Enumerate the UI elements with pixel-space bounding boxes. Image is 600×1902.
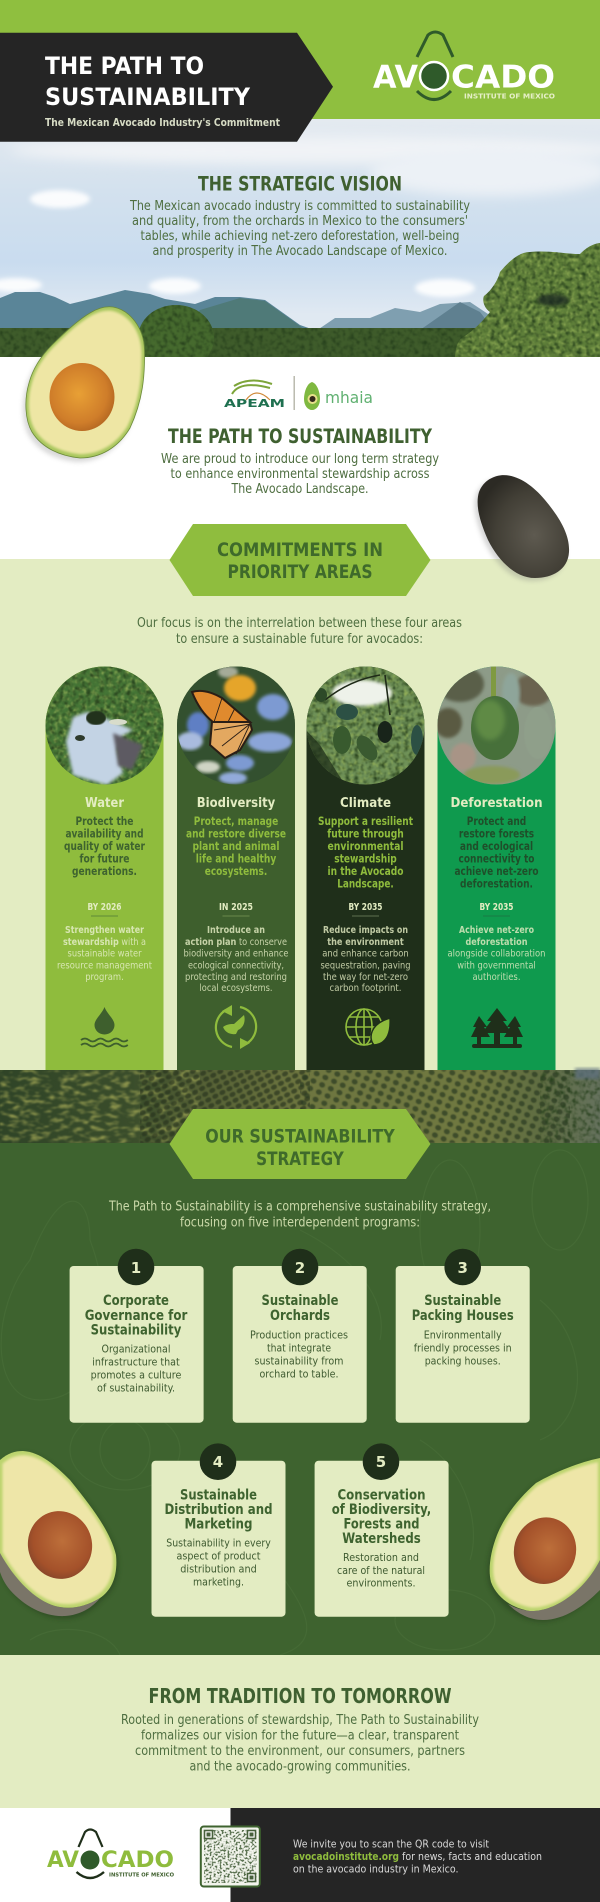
target year: BY 2035: [348, 902, 382, 913]
strategy intro text: focusing on five interdependent programs:: [180, 1216, 420, 1231]
logo: Avocado Institute of Mexico: INSTITUTE OF MEXICO: [464, 93, 555, 101]
action: and enhance carbon: [322, 949, 409, 960]
action: Reduce impacts on: [323, 925, 408, 936]
footer logo: CADO: [101, 1848, 174, 1873]
heading badge: our sustainability strategy: [170, 1109, 430, 1179]
commitment: environmental: [328, 839, 404, 853]
program card 3: [396, 1249, 530, 1423]
footer logo: AV: [47, 1848, 79, 1873]
commitment: Protect and: [467, 814, 526, 828]
header banner: black arrow: [0, 33, 333, 142]
panel: biodiversity: [176, 666, 296, 1070]
icon: globe and leaf: [346, 1009, 390, 1045]
strategic vision text: THE STRATEGIC VISION: [198, 173, 402, 196]
action: authorities.: [472, 972, 520, 983]
program card 2: Production practices: [250, 1329, 348, 1341]
action: stewardship with a: [63, 937, 146, 948]
action: alongside collaboration: [448, 949, 546, 960]
action: resource management: [57, 960, 152, 971]
strategic vision text: The Mexican avocado industry is committed to sustainability: [129, 199, 470, 214]
logo: Avocado Institute of Mexico: AV: [373, 59, 418, 95]
program card 5: 5: [376, 1453, 386, 1471]
commitment: Protect, manage: [194, 814, 278, 828]
heading badge: commitments in priority areas: COMMITMENTS IN: [217, 540, 383, 561]
commitment: deforestation.: [460, 876, 533, 890]
commitment: and restore diverse: [186, 826, 286, 840]
panel: deforestation: Deforestation: [450, 795, 542, 811]
strategic vision text: and prosperity in The Avocado Landscape of Mexico.: [152, 244, 448, 259]
commitment: connectivity to: [458, 852, 535, 866]
photo: halved avocado right: [488, 1458, 600, 1622]
program card 3: Packing Houses: [412, 1308, 514, 1324]
program card 4: distribution and: [180, 1564, 257, 1576]
panel: sustainability strategy: [0, 1109, 600, 1655]
program card 4: 4: [213, 1453, 223, 1471]
action: the way for net-zero: [323, 972, 408, 983]
panel: water: Water: [85, 795, 124, 811]
program card 2: Orchards: [270, 1308, 330, 1324]
subtitle: The Mexican Avocado Industry's Commitment: [45, 117, 280, 129]
heading badge: our sustainability strategy: OUR SUSTAINABILITY: [205, 1127, 395, 1148]
program card 5: Restoration and: [343, 1552, 419, 1564]
panel: climate: Climate: [340, 795, 391, 811]
panel: from tradition to tomorrow: [0, 1655, 600, 1808]
hero photo: sky, mountains and forest: [0, 119, 600, 371]
strategy intro text: The Path to Sustainability is a comprehensive sustainability strategy,: [108, 1200, 491, 1215]
program card 1: 1: [131, 1259, 141, 1277]
action: sequestration, paving: [320, 960, 410, 971]
commitment: availability and: [66, 826, 144, 840]
strategy intro text: [108, 1200, 491, 1231]
focus text: to ensure a sustainable future for avocados:: [176, 632, 423, 647]
panel: water: [45, 666, 165, 1070]
partner logos: APEAM and mhaia: [224, 376, 373, 410]
title: [45, 52, 251, 111]
strategic vision text: [129, 173, 470, 259]
program card 3: packing houses.: [425, 1355, 501, 1367]
action: Introduce an: [207, 925, 265, 936]
panel: from tradition to tomorrow: FROM TRADITION TO TOMORROW: [148, 1684, 452, 1708]
photo: halved avocado left: [0, 1451, 118, 1619]
program card 5: Forests and: [344, 1516, 420, 1532]
program card 4: Sustainability in every: [166, 1538, 271, 1550]
program card 2: sustainability from: [254, 1355, 344, 1367]
action: sustainable water: [68, 949, 142, 960]
program card 5: Conservation: [338, 1487, 426, 1503]
action: ecological connectivity,: [188, 960, 284, 971]
commitment: restore forests: [459, 826, 534, 840]
photo: whole dark avocado: [475, 475, 569, 581]
program card 1: infrastructure that: [92, 1356, 180, 1368]
program card 2: [233, 1249, 367, 1423]
panel: from tradition to tomorrow: Rooted in generations of stewardship, The Path to Sustainability: [121, 1713, 479, 1728]
commitment: [64, 814, 145, 878]
strategic vision text: tables, while achieving net-zero deforestation, well-being: [140, 229, 460, 244]
panel: from tradition to tomorrow: and the avocado-growing communities.: [190, 1760, 410, 1775]
commitment: life and healthy: [196, 852, 277, 866]
program card 3: friendly processes in: [414, 1342, 512, 1354]
photo: stream: [45, 666, 165, 786]
header band: [0, 0, 600, 119]
program card 1: Sustainability: [91, 1322, 181, 1338]
commitment: achieve net-zero: [454, 864, 539, 878]
title: THE PATH TO: [45, 52, 204, 80]
commitment: plant and animal: [192, 839, 280, 853]
action: [448, 925, 546, 983]
icon: trees: [471, 1008, 523, 1048]
program card 4: Marketing: [184, 1516, 252, 1532]
partner logos: APEAM and mhaia: APEAM: [224, 397, 285, 410]
footer: [0, 1808, 600, 1902]
program card 4: marketing.: [193, 1577, 244, 1589]
commitment: [454, 814, 539, 890]
commitment: and ecological: [460, 839, 533, 853]
footer logo: INSTITUTE OF MEXICO: [109, 1873, 175, 1879]
title: SUSTAINABILITY: [45, 83, 251, 111]
program card 1: promotes a culture: [91, 1370, 181, 1382]
panel: from tradition to tomorrow: commitment to the environment, our consumers, partners: [135, 1744, 465, 1759]
action: Achieve net-zero: [459, 925, 534, 936]
commitment: generations.: [72, 864, 137, 878]
action: the environment: [327, 937, 404, 948]
program card 2: orchard to table.: [260, 1368, 338, 1380]
program card 5: of Biodiversity,: [332, 1502, 431, 1518]
logo: Avocado Institute of Mexico: CADO: [451, 59, 555, 95]
commitment: quality of water: [64, 839, 145, 853]
action: Strengthen water: [65, 925, 144, 936]
call to action text: avocadoinstitute.org: [293, 1851, 399, 1863]
program card 3: Environmentally: [424, 1329, 502, 1341]
photo: avocado on branch: [434, 666, 557, 786]
program card 5: Watersheds: [342, 1531, 421, 1547]
strategic vision text: and quality, from the orchards in Mexico to the consumers': [132, 214, 468, 229]
program card 1: Governance for: [85, 1308, 187, 1324]
action: [320, 925, 410, 994]
commitment: in the Avocado: [328, 864, 404, 878]
heading badge: our sustainability strategy: STRATEGY: [256, 1149, 344, 1170]
panel: biodiversity: Biodiversity: [197, 795, 275, 811]
commitment: ecosystems.: [205, 864, 267, 878]
commitment: Protect the: [76, 814, 134, 828]
target year: IN 2025: [219, 902, 253, 913]
panel: from tradition to tomorrow: formalizes our vision for the future—a clear, transparent: [141, 1728, 459, 1743]
photo: halved avocado top left: [23, 307, 145, 462]
path to sustainability intro text: The Avocado Landscape.: [231, 482, 368, 497]
heading badge: commitments in priority areas: [170, 524, 430, 596]
action: action plan to conserve: [185, 937, 287, 948]
photo: canopy: [306, 666, 426, 790]
commitment: future through: [327, 826, 404, 840]
path to sustainability intro text: to enhance environmental stewardship across: [170, 467, 430, 482]
action: program.: [85, 972, 124, 983]
photo: aerial orchard strip: [0, 1068, 600, 1143]
program card 5: care of the natural: [337, 1565, 425, 1577]
action: [57, 925, 152, 983]
action: biodiversity and enhance: [184, 949, 289, 960]
commitment: [186, 814, 286, 878]
program card 3: Sustainable: [424, 1293, 501, 1309]
panel: climate: [306, 666, 426, 1070]
action: carbon footprint.: [330, 983, 402, 994]
program card 5: [315, 1443, 449, 1617]
commitment: for future: [80, 852, 130, 866]
program card 4: Sustainable: [180, 1487, 257, 1503]
icon: water drop and waves: [81, 1007, 128, 1046]
path to sustainability intro text: THE PATH TO SUSTAINABILITY: [168, 425, 433, 448]
program card 2: Sustainable: [262, 1293, 338, 1309]
action: with governmental: [457, 960, 536, 971]
target year: BY 2035: [480, 902, 514, 913]
icon: butterfly in cycle arrows: [216, 1005, 256, 1049]
focus text: [137, 616, 462, 647]
action: local ecosystems.: [200, 983, 272, 994]
action: deforestation: [466, 937, 528, 948]
program card 2: 2: [295, 1259, 305, 1277]
call to action text: [293, 1838, 542, 1876]
call to action text: We invite you to scan the QR code to visit: [293, 1838, 489, 1850]
program card 1: Organizational: [102, 1343, 170, 1355]
program card 3: 3: [457, 1259, 468, 1277]
program card 1: of sustainability.: [97, 1383, 175, 1395]
commitment: Landscape.: [337, 876, 394, 890]
call to action text: on the avocado industry in Mexico.: [293, 1864, 458, 1876]
program card 2: that integrate: [267, 1342, 331, 1354]
program card 4: [152, 1443, 286, 1617]
program card 4: aspect of product: [176, 1550, 260, 1562]
QR code: [201, 1826, 260, 1886]
heading badge: commitments in priority areas: PRIORITY AREAS: [228, 562, 372, 583]
program card 1: [70, 1249, 204, 1423]
panel: deforestation: [434, 666, 557, 1070]
action: [184, 925, 289, 994]
program card 4: Distribution and: [164, 1502, 272, 1518]
program card 5: environments.: [346, 1578, 416, 1590]
footer logo: [47, 1830, 175, 1879]
commitment: stewardship: [334, 852, 397, 866]
logo: Avocado Institute of Mexico: [373, 32, 555, 101]
path to sustainability intro text: [161, 425, 439, 497]
action: protecting and restoring: [185, 972, 287, 983]
photo: monarch butterfly: [176, 666, 296, 786]
target year: BY 2026: [88, 902, 122, 913]
program card 1: Corporate: [103, 1293, 169, 1309]
call to action text: for news, facts and education: [402, 1851, 542, 1863]
commitment: [318, 814, 413, 890]
pale green section background: [0, 559, 600, 1070]
partner logos: APEAM and mhaia: mhaia: [325, 388, 373, 407]
path to sustainability intro text: We are proud to introduce our long term strategy: [161, 452, 439, 467]
commitment: Support a resilient: [318, 814, 413, 828]
focus text: Our focus is on the interrelation between these four areas: [137, 616, 462, 631]
